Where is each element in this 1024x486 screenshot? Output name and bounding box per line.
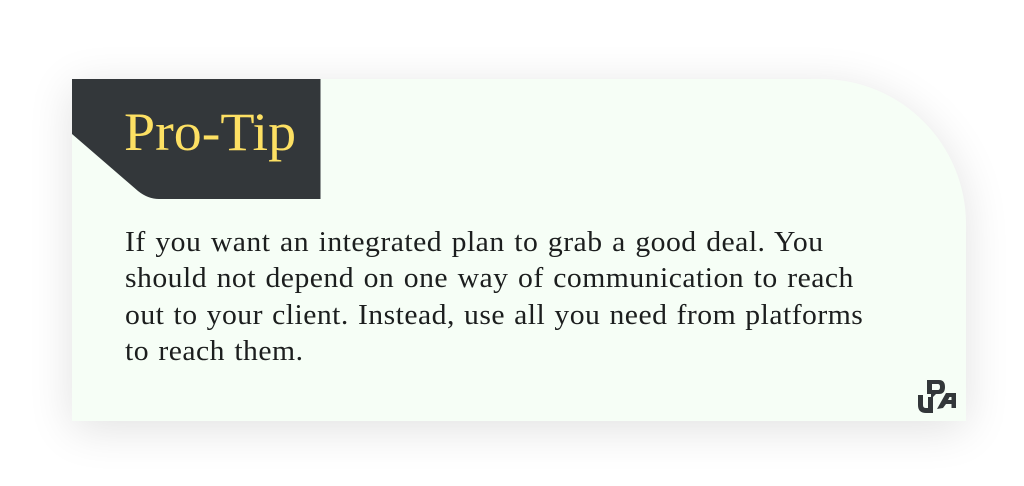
icon: logo <box>918 380 956 413</box>
text block: tip body: out to your client. Instead, use all you need from platforms <box>125 300 863 331</box>
text block: tip body: to reach them. <box>125 336 303 367</box>
title: Pro-Tip <box>124 102 296 162</box>
panel: pro-tip card <box>72 79 966 421</box>
heading tab <box>72 79 320 199</box>
text block: tip body <box>125 227 863 367</box>
text block: tip body: If you want an integrated plan to grab a good deal. You <box>125 227 824 258</box>
text block: tip body: should not depend on one way of communication to reach <box>125 263 854 294</box>
